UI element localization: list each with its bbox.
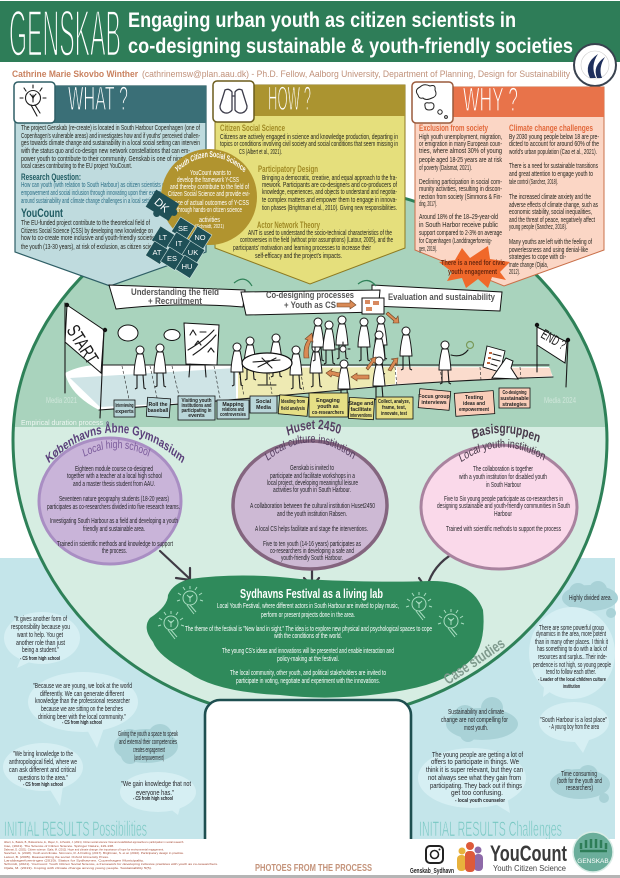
text: project description: local cases contributing to the EU project YouCount. bbox=[21, 161, 132, 170]
banner: understanding the field bbox=[109, 285, 245, 309]
text: climate change challenges: take control (Sanchez, 2018). bbox=[509, 177, 558, 186]
text: exclusion from society: for Copenhagen (Landdragerforenig- bbox=[419, 236, 492, 245]
banner: co-designing: Co-designing processes bbox=[266, 290, 354, 301]
cloud: time consuming: Time consuming bbox=[561, 769, 597, 778]
label: empirical duration process: Empirical duration process bbox=[21, 420, 103, 427]
quote: group dynamics bbox=[529, 607, 615, 699]
cloud: sustainability not compelling: Sustainability and climate bbox=[448, 707, 504, 716]
references: Latour, B. (2005). Reassembling the social. Oxford University Press. bbox=[4, 855, 109, 859]
text: exclusion from society: Exclusion from society bbox=[419, 123, 488, 133]
activity boxes: Collect, analyze, bbox=[378, 399, 410, 405]
activity boxes: Media bbox=[256, 405, 271, 411]
text: exclusion from society: Declining participation in social com- bbox=[419, 177, 502, 186]
festival text: participate in voting, negotiate and experiment with the innovations. bbox=[236, 678, 380, 685]
quote: offers to participate: The young people are getting a lot of bbox=[432, 750, 523, 759]
references bbox=[4, 840, 218, 870]
case text: local project, developing meaningful leisure bbox=[267, 480, 358, 487]
circle text: through hands-on citizen science bbox=[177, 207, 242, 214]
text: project description: Copenhagen's vulnerable areas) and investigates how and if youths' perceived challen- bbox=[21, 131, 200, 140]
text: actor network theory: Actor Network Theory bbox=[257, 220, 320, 230]
quote: anthropological field: "We bring knowledge to the bbox=[13, 749, 73, 758]
text: climate change challenges: mate change (Ojala, bbox=[509, 260, 548, 269]
media labels: Media 2021 bbox=[46, 396, 77, 405]
circle text: Citizen Social Science and provide evi- bbox=[168, 191, 250, 198]
curved heading: Youth Citizen Social Science bbox=[174, 151, 246, 172]
media labels: Media 2024 bbox=[544, 396, 576, 405]
text: participatory design: tion phases (Brightman et al., 2010). Giving new responsibilities. bbox=[262, 203, 397, 212]
cloud: giving the youth a space: creates engagement bbox=[133, 745, 165, 754]
quote: we are young: because we are sitting on the benches bbox=[41, 704, 123, 713]
text: actor network theory: participants' motivation and learning processes to increase their bbox=[233, 243, 371, 252]
text: project description: ges towards climate change and sustainability in a local social setting can intervein bbox=[21, 138, 200, 147]
case text: participate and facilitate workshops in a bbox=[270, 473, 355, 480]
text: YouCount bbox=[21, 206, 165, 251]
activity boxes: field analysis bbox=[281, 406, 305, 412]
text: research question: How can youth (with relation to South Harbour) as citizen scientists gain bbox=[21, 180, 171, 189]
quote: offers to participate: not always see what they gain from bbox=[428, 773, 521, 782]
text: climate change challenges: 2012). bbox=[509, 267, 520, 276]
case text: participates as co-researchers divided into five research teams. bbox=[47, 504, 180, 511]
case text: Five to Six young people participate as co-researchers in bbox=[444, 496, 563, 503]
flag: END: END ? bbox=[538, 326, 569, 353]
text: participatory design: te complex matters and empower them to engage in innova- bbox=[262, 195, 397, 204]
case text: co-researchers in developing a safe and bbox=[270, 548, 354, 555]
text: actor network theory: controversies in the field (without prior assumptions) (Latour, 2005), and the bbox=[240, 235, 393, 244]
case text: A local CS helps facilitate and stage the interventions. bbox=[255, 526, 368, 533]
icon: thought clouds bbox=[412, 82, 453, 123]
text: participatory design: Bringing a democratic, creative, and equal approach to the fra- bbox=[262, 173, 397, 182]
case text: Seventeen nature geography students (18-20 years) bbox=[59, 496, 169, 503]
icon: binoculars bbox=[213, 81, 254, 122]
quote: offers to participate: offers to participate in things. We bbox=[431, 757, 519, 766]
quote: responsibility bbox=[4, 612, 80, 668]
banner: understanding the field: + Recruitment bbox=[148, 296, 203, 307]
activity boxes: Roll the bbox=[148, 402, 168, 408]
case text: and the youth institution Rabsen. bbox=[277, 511, 347, 518]
quote: responsibility: being a student." bbox=[22, 645, 59, 654]
footer background bbox=[0, 839, 620, 875]
references: Landdragerforeningen (2019). Status for Sydhavnen. Copenhagen Municipality. bbox=[4, 858, 144, 862]
circle text: dence of actual outcomes of Y-CSS bbox=[169, 200, 249, 207]
quote: responsibility: another role than just bbox=[16, 638, 65, 647]
quote: anthropological field: can ask different and critical bbox=[9, 765, 76, 774]
activity boxes: sustainable bbox=[500, 396, 529, 402]
quote: gain knowledge: "We gain knowledge that not bbox=[121, 779, 191, 788]
quote: we are young: drinking beer with the local community." bbox=[38, 712, 126, 721]
circle text: activities bbox=[199, 217, 220, 224]
panel: WHY bbox=[412, 81, 604, 288]
logo: YouCount bbox=[490, 841, 567, 873]
caption: photos from the process: PHOTOES FROM THE PROCESS bbox=[255, 862, 372, 874]
panel: WHAT: WHAT ? bbox=[68, 80, 128, 118]
text: exclusion from society: tries, where almost 30% of young bbox=[419, 146, 502, 155]
panel: Sydhavns Festival blob bbox=[147, 576, 484, 698]
activity boxes: strategies bbox=[502, 402, 527, 408]
case heading: Huset 2450 bbox=[286, 420, 341, 436]
case text: Five to ten youth (14-16 years) participates as bbox=[263, 541, 361, 548]
case subheading: Local youth institution bbox=[458, 438, 545, 462]
text: citizen social science: Citizen Social Science bbox=[220, 123, 285, 133]
icon: light bulb idea bbox=[336, 342, 350, 352]
cloud: giving the youth a space: and external their competencies bbox=[119, 737, 177, 746]
text: exclusion from society bbox=[419, 123, 502, 253]
text: project description bbox=[20, 123, 201, 170]
case text bbox=[437, 466, 570, 533]
panel: case Basisgruppen bbox=[420, 424, 578, 570]
activity boxes: Mapping bbox=[222, 402, 244, 408]
text: citizen social science: topics or conditions involving civil society and social conditions that seem missing in bbox=[220, 139, 398, 148]
text: climate change challenges: strategies to cope with cli- bbox=[509, 252, 566, 261]
flag: START bbox=[62, 303, 107, 418]
arrows to festival bbox=[160, 551, 454, 588]
quote bubbles: challenges bbox=[418, 581, 618, 813]
case text: Trained in scientific methods and knowledge to support bbox=[57, 541, 173, 548]
text: climate change challenges bbox=[508, 123, 599, 276]
festival text bbox=[185, 603, 432, 685]
activity boxes: co-researchers bbox=[312, 410, 344, 416]
flag: END bbox=[535, 323, 570, 387]
logo: YouCount: YouCount bbox=[490, 841, 567, 866]
activity boxes: controversies bbox=[220, 412, 246, 418]
activity boxes: events bbox=[188, 413, 205, 419]
icon: puzzle of partner countries: IT bbox=[176, 239, 183, 248]
banner: co-designing: + Youth as CS bbox=[284, 300, 336, 311]
text: exclusion from society: nection from society (Simmons & Fin- bbox=[419, 192, 502, 201]
icon: puzzle of partner countries: LT bbox=[159, 233, 168, 242]
banner: co-designing bbox=[241, 290, 380, 315]
text: actor network theory bbox=[233, 220, 393, 260]
festival text: with the conditions of the world. bbox=[273, 633, 342, 640]
text: YouCount: the youth (13-30 years), at risk of exclusion, as citizen scientists. bbox=[21, 242, 165, 251]
activity boxes: institutions and bbox=[182, 403, 212, 409]
text: INITIAL RESULTS Possibilities bbox=[4, 818, 147, 841]
case text: activities for youth in South Harbour. bbox=[273, 487, 351, 494]
text: participatory design: mework. Participants are co-designers and co-producers of bbox=[262, 180, 398, 189]
festival text: Local Youth Festival, where different actors in South Harbour are invited to play music, bbox=[217, 603, 399, 610]
quote: we are young: differently. We can generate different bbox=[40, 689, 124, 698]
activity boxes: Testing bbox=[465, 395, 483, 401]
activity boxes: relations and bbox=[222, 407, 244, 413]
case text: youth-friendly South Harbour. bbox=[281, 555, 343, 562]
text: YouCount: YouCount bbox=[21, 206, 63, 220]
icon: table bbox=[242, 353, 292, 385]
text: exclusion from society: Around 18% of the 18–29-year-old bbox=[419, 212, 498, 221]
festival text: The local community, other youth, and political stakeholders are invited to bbox=[230, 670, 386, 677]
circle text: (Schmidt, 2021) bbox=[195, 224, 224, 230]
author line: Cathrine Marie Skovbo Winther bbox=[12, 69, 138, 80]
text: research question bbox=[21, 172, 173, 205]
text: YouCount: The EU-funded project contribute to the theoretical field of bbox=[21, 218, 151, 227]
heading WHY: WHY ? bbox=[463, 81, 518, 119]
text: exclusion from society: of poverty (Dalsmat, 2021). bbox=[419, 163, 472, 172]
large process circle bbox=[12, 197, 608, 706]
text: exclusion from society: High youth unemployment, migration, bbox=[419, 132, 502, 141]
icon: checklist and flask bbox=[483, 346, 518, 379]
case text: Trained with scientific methods to support the process bbox=[446, 526, 561, 533]
icon: puzzle of partner countries: AT bbox=[152, 248, 162, 257]
callout: need for civic youth engagement: youth engagement bbox=[448, 267, 497, 276]
cloud: giving the youth a space bbox=[114, 724, 178, 764]
references: Albert, A., Balazs, B., Butkeviciene, E., Mayer, K., & Perelló, J. (2021). Citizen social science: New and established approaches to participation in social research. bbox=[4, 840, 184, 844]
text: participatory design: knowledge, experiences, and objects to understand and negotia- bbox=[262, 187, 397, 196]
activity boxes: empowerment bbox=[459, 407, 489, 413]
quote: we are young: "Because we are young, we look at the world bbox=[33, 681, 132, 690]
quote: anthropological field: anthropological field, where we bbox=[9, 757, 77, 766]
case text: together with a teacher at a local high school bbox=[67, 473, 162, 480]
quote: gain knowledge: everyone has." bbox=[136, 788, 174, 797]
case text: with a youth institution for disabled youth bbox=[458, 474, 547, 481]
festival text: The theme of the festival is "New land in sight." The idea is to explore new physical and psychological spaces to cope bbox=[185, 626, 432, 633]
activity boxes: Focus group bbox=[418, 394, 450, 400]
label: case studies: Case studies bbox=[441, 635, 508, 688]
activity boxes: Ideating from bbox=[281, 399, 305, 405]
text: research question: Research Question: bbox=[21, 172, 81, 182]
case text bbox=[250, 465, 375, 562]
photo frame bbox=[205, 700, 411, 859]
case text: friendly and sustainable area. bbox=[83, 526, 145, 533]
icon: paper board bbox=[362, 298, 384, 314]
quote: we are young: - CS from high school bbox=[62, 720, 102, 726]
text: citizen social science: Citizens are actively engaged in science and knowledge production, departing in bbox=[220, 132, 398, 141]
festival text: policy-making at the festival. bbox=[277, 656, 339, 663]
logo: YouCount: Youth Citizen Science bbox=[493, 864, 567, 873]
text: exclusion from society: in South Harbor receive public bbox=[419, 220, 498, 229]
activity boxes: Interviewing bbox=[116, 403, 134, 409]
circle text bbox=[168, 170, 250, 230]
cloud: highly divided area bbox=[562, 581, 618, 618]
header banner bbox=[0, 0, 620, 70]
references: Sanchez, G. (2018). Youth and climate. Simmons, R. & Finding, (2017). Brightman, S. et al. (2010). Participatory design in practice. bbox=[4, 851, 184, 855]
media labels bbox=[46, 396, 576, 405]
quote: offers to participate bbox=[418, 748, 526, 813]
case text: Eighteen module course co-designed bbox=[75, 466, 153, 473]
quote: south harbour lost place bbox=[539, 702, 609, 753]
activity boxes: frame, test, bbox=[382, 405, 406, 411]
text: project description: power youth to contribute to their community. Genskab is one of nine bbox=[21, 154, 183, 163]
activity boxes: experts bbox=[115, 409, 134, 415]
text: citizen social science bbox=[220, 123, 398, 156]
cloud: giving the youth a space: (and empowerment) bbox=[134, 753, 164, 762]
banner: evaluation bbox=[372, 285, 502, 311]
panel: HOW: HOW ? bbox=[268, 80, 311, 118]
icon: instagram: Genskab_Sydhavn bbox=[410, 868, 454, 875]
icon: flipchart bbox=[184, 323, 219, 377]
text: YouCount: Citizens Social Science (CSS) by developing new knowledge on bbox=[21, 226, 153, 235]
quote: we are young: knowledge than the professional researcher bbox=[35, 696, 130, 705]
case text: Harbour bbox=[494, 511, 512, 518]
references: Dalsmat, D. (2021). Citizen science. Ojala, M. (2012). Hope and climate change: the importance of hope for environmental engagement. bbox=[4, 848, 164, 852]
icon: YouCount people bbox=[457, 842, 483, 872]
references: Ojala, M. (2013). Coping with climate change among young people. Sustainability 5(5). bbox=[4, 866, 152, 870]
text: exclusion from society: support compared to 2-3% on average bbox=[419, 228, 502, 237]
quote: anthropological field bbox=[3, 743, 83, 806]
puzzle piece DK: DK bbox=[152, 196, 172, 216]
cloud: sustainability not compelling: change are not compelling for bbox=[441, 715, 508, 724]
activity boxes: interviews bbox=[421, 400, 447, 406]
text: project description: The project Genskab (re-create) is located in South Harbour Copenhagen (one of bbox=[21, 123, 201, 132]
callout: need for civic youth engagement bbox=[439, 246, 510, 288]
quote: group dynamics: institution bbox=[563, 684, 580, 690]
activity boxes: facilitate bbox=[350, 407, 372, 413]
references: Schmidt, (2021). YouCount: Youth Citizen Social Science, a framework for developing inclusive practices with youth as co-researchers. bbox=[4, 862, 218, 866]
banner: evaluation: Evaluation and sustainability bbox=[388, 292, 496, 303]
case text bbox=[47, 466, 180, 555]
references: Cao, (2021). The Science of Citizen Science. Springer Nature, 119-138. bbox=[4, 844, 114, 848]
cloud: sustainability not compelling: most youth. bbox=[464, 723, 488, 732]
activity boxes: ideas and bbox=[463, 401, 485, 407]
main title: Engaging urban youth as citizen scientists in bbox=[128, 9, 516, 32]
festival heading: Sydhavns Festival as a living lab bbox=[240, 587, 383, 601]
cloud: giving the youth a space: Giving the youth a space to speak bbox=[118, 729, 178, 738]
text: exclusion from society: gen, 2019). bbox=[419, 244, 437, 253]
panel: WHAT bbox=[14, 80, 206, 286]
activity boxes: baseball bbox=[148, 408, 169, 414]
activity boxes: Visiting youth bbox=[182, 398, 212, 404]
case text: and a master thesis student from AAU. bbox=[73, 481, 155, 488]
activity boxes: Social bbox=[256, 399, 272, 405]
people along the process bbox=[118, 316, 474, 403]
icon: light bulb bbox=[14, 82, 55, 123]
quote: we are young bbox=[28, 672, 138, 748]
text: YouCount: how to co-create more inclusive and youth-friendly societies for bbox=[21, 233, 165, 242]
circle text: and thereby contribute to the field of bbox=[170, 184, 249, 191]
text: exclusion from society: ding, 2017). bbox=[419, 199, 437, 208]
quote: gain knowledge: - CS from high school bbox=[133, 796, 173, 802]
activity boxes: Co-designing bbox=[502, 390, 526, 396]
quote: responsibility: responsibility because you bbox=[11, 622, 70, 631]
quote: responsibility: - CS from high school bbox=[20, 656, 60, 662]
activity boxes: Stage and bbox=[349, 401, 373, 407]
callout: need for civic youth engagement: There is a need for civic bbox=[441, 258, 505, 267]
text: research question: empowerment and social inclusion through innovating upon their experiences bbox=[21, 188, 173, 197]
banner: understanding the field: Understanding the field bbox=[131, 287, 219, 298]
activity boxes bbox=[114, 388, 530, 420]
panel: Youth Citizen Social Science circle bbox=[161, 149, 257, 245]
activity boxes: Engaging bbox=[316, 398, 340, 404]
quote bubbles: possibilities bbox=[3, 612, 196, 815]
activity boxes: interventions bbox=[350, 413, 372, 419]
case text: in South Harbour bbox=[486, 482, 521, 489]
text: actor network theory: ANT is used to understand the socio-technical characteristics of the bbox=[248, 228, 392, 237]
panel: case Huset 2450 bbox=[231, 420, 389, 571]
text: participatory design: Participatory Design bbox=[258, 164, 318, 174]
text: exclusion from society: or emigration in many European coun- bbox=[419, 139, 502, 148]
road timeline bbox=[65, 365, 553, 410]
cloud: sustainability not compelling bbox=[441, 697, 518, 742]
case text: Investigating South Harbour as a field and developing a youth bbox=[50, 518, 178, 525]
icon: puzzle of partner countries: ES bbox=[167, 254, 177, 263]
text: exclusion from society: people aged 18-25 years are at risk bbox=[419, 155, 502, 164]
quote: anthropological field: - CS from high school bbox=[23, 782, 63, 788]
text: research question: around sustainability and climate change challenges in a local setting? bbox=[21, 196, 157, 205]
logo: Genskab round bbox=[573, 832, 613, 872]
case text: Genskab is invited to bbox=[290, 465, 334, 472]
quote: offers to participate: get too confusing. bbox=[451, 788, 503, 797]
phase banners bbox=[109, 279, 502, 315]
cloud: time consuming bbox=[550, 765, 610, 803]
case text: A collaboration between the cultural institution Huset2450 bbox=[250, 503, 375, 510]
case text: The collaboration is together bbox=[473, 466, 533, 473]
quote: offers to participate: - local youth counselor bbox=[455, 798, 506, 804]
case subheading: Local high school bbox=[82, 440, 150, 456]
icon: puzzle of partner countries: NO bbox=[194, 233, 206, 242]
icon: puzzle of partner countries: HU bbox=[182, 262, 192, 271]
author line: (cathrinemsw@plan.aau.dk) - Ph.D. Fellow, Aalborg University, Department of Planning, Design for Sustainability bbox=[142, 69, 570, 80]
activity boxes: innovate, test bbox=[381, 411, 407, 417]
flag: START: START bbox=[62, 322, 102, 368]
icon: puzzle of partner countries bbox=[144, 190, 212, 278]
text: citizen social science: CS (Albert et al., 2021). bbox=[239, 147, 282, 156]
text: participatory design bbox=[258, 164, 398, 212]
activity boxes: participating in bbox=[182, 408, 212, 414]
text: climate change challenges: young people (Sanchez, 2018). bbox=[509, 222, 567, 231]
case heading: Københavns Åbne Gymnasium bbox=[45, 421, 184, 463]
main title bbox=[128, 9, 573, 58]
icon: idea bulbs bbox=[158, 586, 464, 639]
quote: gain knowledge bbox=[120, 772, 196, 815]
panel: case Kobenhavns Abne Gymnasium bbox=[38, 421, 184, 566]
text: exclusion from society: munity activities, resulting in discon- bbox=[419, 184, 502, 193]
festival text: perform or present projects done in the area. bbox=[261, 612, 355, 619]
quote: offers to participate: think it is super relevant, but they can bbox=[426, 765, 523, 774]
festival text: The young CS's ideas and innovations will be presented and enable interaction and bbox=[222, 648, 394, 655]
icon: instagram bbox=[410, 846, 454, 875]
quote: responsibility: want to help. You get bbox=[16, 630, 63, 639]
quote: offers to participate: participating. They back out if things bbox=[430, 781, 522, 790]
icon: Aalborg University seal bbox=[574, 44, 616, 86]
icon: puzzle of partner countries: UK bbox=[188, 248, 198, 257]
circle text: develop the framework Y-CSS bbox=[177, 177, 239, 184]
case heading: Basisgruppen bbox=[472, 424, 540, 442]
activity boxes: youth as bbox=[317, 404, 339, 410]
icon: puzzle of partner countries: SE bbox=[178, 224, 188, 233]
text: actor network theory: self-efficacy and the project's impacts. bbox=[255, 251, 342, 260]
logo: Genskab round: GENSKAB bbox=[577, 858, 609, 865]
case text: the process. bbox=[102, 548, 127, 555]
circle text: YouCount wants to bbox=[190, 170, 231, 177]
panel: HOW bbox=[213, 80, 405, 284]
quote: responsibility: "It gives another form of bbox=[14, 614, 67, 623]
case subheading: Local culture institution bbox=[264, 434, 355, 461]
quote: anthropological field: questions to the area." bbox=[18, 773, 68, 782]
orange arrows bbox=[304, 300, 399, 381]
cloud: time consuming: researchers) bbox=[566, 783, 593, 792]
text: project description: with the status quo and co-design new network constellations that can em- bbox=[20, 146, 190, 155]
